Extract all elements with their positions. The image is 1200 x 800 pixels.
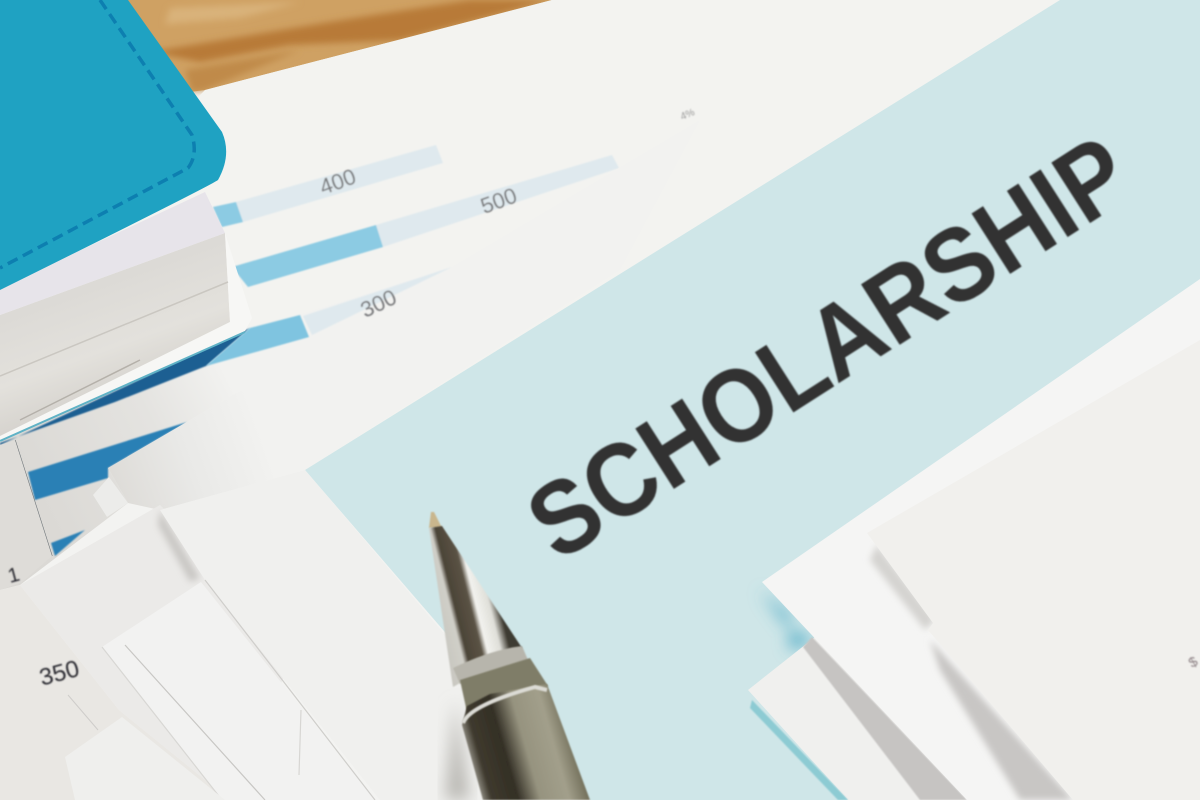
notebook cover bbox=[0, 0, 226, 290]
upper white sheet bbox=[108, 120, 700, 510]
bar: 500 bbox=[232, 155, 619, 287]
notebook bbox=[0, 0, 252, 442]
bar: 400: 400 bbox=[316, 164, 359, 200]
pen bbox=[429, 512, 590, 800]
notebook pages bbox=[0, 233, 230, 438]
number 350: 350 bbox=[37, 655, 82, 692]
lower right paper stack bbox=[748, 279, 1200, 800]
small page mark: $ bbox=[1186, 653, 1200, 671]
lower left chart sheet bbox=[0, 267, 452, 590]
chart paper with scores bbox=[0, 0, 1060, 470]
left paper stack bbox=[0, 470, 585, 800]
blue scholarship sheet bbox=[305, 0, 1200, 800]
scholarship heading: SCHOLARSHIP bbox=[508, 114, 1150, 582]
small chart label: 4% bbox=[679, 107, 697, 123]
bar: 300: 300 bbox=[357, 284, 400, 323]
bar: 300 bbox=[206, 267, 452, 366]
bar: 400 bbox=[213, 145, 443, 227]
bar: 500: 500 bbox=[477, 183, 520, 219]
wood desk surface bbox=[125, 0, 552, 92]
number 1: 1 bbox=[6, 564, 22, 588]
